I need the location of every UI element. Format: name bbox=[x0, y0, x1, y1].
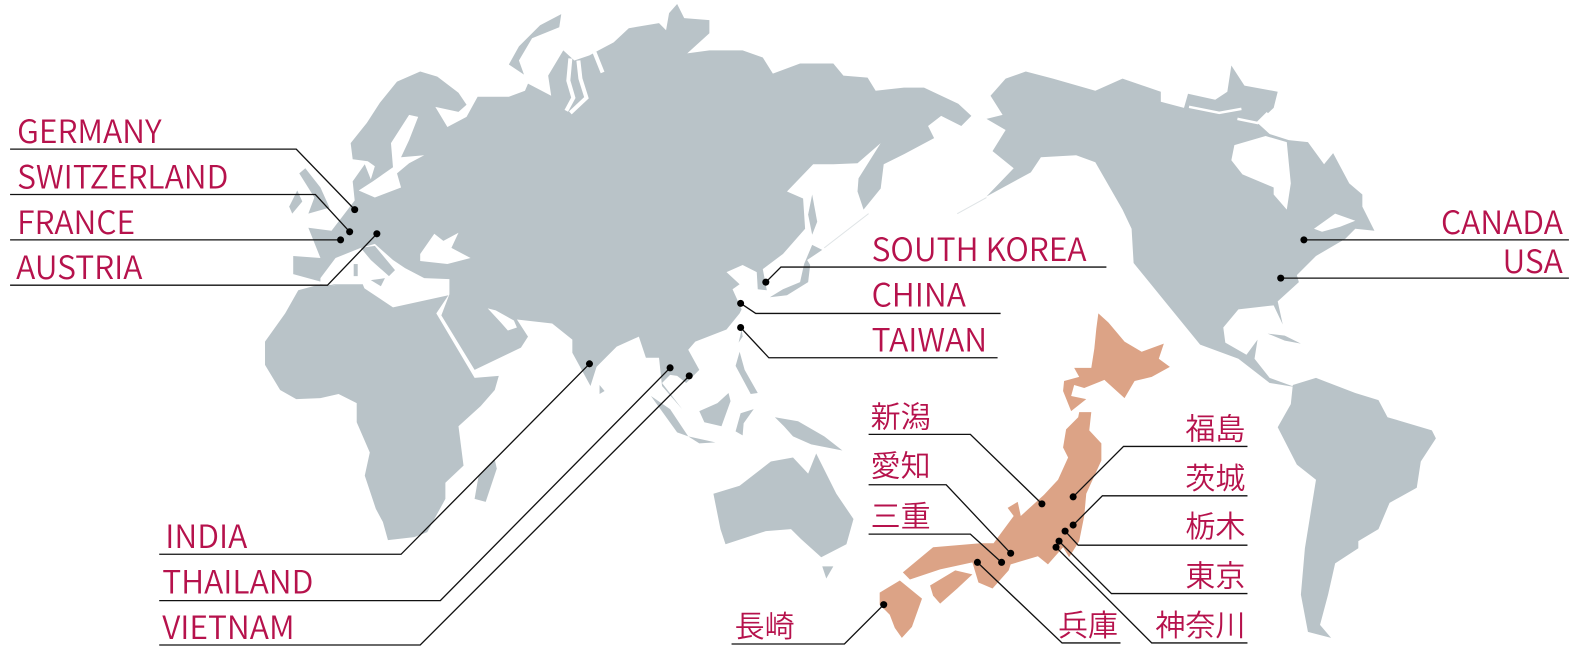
Kyushu bbox=[880, 580, 922, 638]
callout: Switzerland: SWITZERLAND bbox=[17, 152, 228, 198]
callout: Ibaraki: 茨城 bbox=[1185, 454, 1245, 498]
callout: Vietnam: VIETNAM bbox=[162, 603, 295, 648]
island: Sulawesi bbox=[736, 409, 754, 435]
island: Sumatra bbox=[651, 396, 688, 436]
callout: Austria bbox=[10, 230, 380, 289]
callout: Ibaraki bbox=[1070, 454, 1247, 529]
callout: France bbox=[10, 198, 344, 244]
sea: Arctic channels bbox=[1189, 107, 1268, 123]
callout: Switzerland bbox=[10, 152, 353, 235]
callout: Hyogo bbox=[974, 559, 1121, 645]
island: Sri Lanka bbox=[600, 385, 605, 394]
callout: Kanagawa: 神奈川 bbox=[1155, 601, 1245, 645]
callout: Austria: AUSTRIA bbox=[16, 243, 142, 289]
sea: Baltic bbox=[359, 115, 424, 198]
landmass: Eurasia bbox=[293, 4, 971, 409]
island: Sardinia bbox=[354, 264, 358, 276]
callout: Tochigi: 栃木 bbox=[1185, 502, 1245, 546]
island: Sakhalin bbox=[808, 195, 817, 235]
island: Ireland bbox=[289, 190, 302, 214]
callout: Tochigi bbox=[1062, 502, 1247, 546]
callout: Aichi bbox=[869, 442, 1014, 557]
callout: Thailand: THAILAND bbox=[162, 558, 313, 604]
callout: South Korea bbox=[762, 225, 1106, 286]
callout: Fukushima: 福島 bbox=[1185, 404, 1245, 448]
sea: Hudson Bay bbox=[1231, 136, 1291, 210]
callout: Thailand bbox=[159, 364, 674, 604]
callout: India bbox=[159, 360, 593, 558]
island: Japan in grey bbox=[770, 245, 822, 297]
callout: Nagasaki bbox=[732, 601, 887, 646]
island: Borneo bbox=[699, 393, 731, 426]
Hokkaido bbox=[1063, 313, 1170, 411]
sea: Gulf of St Lawrence bbox=[1314, 214, 1355, 232]
Shikoku bbox=[930, 570, 972, 604]
landmass: South America bbox=[1278, 378, 1436, 638]
island: Tasmania bbox=[822, 566, 833, 578]
sea: Black Sea bbox=[420, 233, 471, 264]
callout: USA bbox=[1277, 237, 1569, 283]
world map bbox=[265, 4, 1436, 638]
callout: Tokyo: 東京 bbox=[1185, 552, 1245, 596]
callout: India: INDIA bbox=[165, 512, 247, 558]
callout: Niigata: 新潟 bbox=[871, 392, 931, 436]
callout: Mie bbox=[869, 492, 1005, 566]
sea: Persian Gulf bbox=[488, 308, 517, 331]
callout: USA: USA bbox=[1502, 237, 1563, 283]
callout: Taiwan: TAIWAN bbox=[872, 316, 987, 362]
sea: Arctic inlets bbox=[566, 52, 603, 113]
landmass: Italy bbox=[361, 246, 395, 276]
island: Java bbox=[688, 436, 715, 443]
island: Philippines bbox=[736, 352, 758, 394]
callout: Germany: GERMANY bbox=[17, 107, 162, 153]
callout: Canada: CANADA bbox=[1441, 198, 1563, 244]
sea: Gulf of California bbox=[1165, 304, 1184, 335]
callout: Niigata bbox=[869, 392, 1045, 507]
callout: Germany bbox=[10, 107, 358, 213]
map of Japan bbox=[880, 313, 1170, 638]
callout: China: CHINA bbox=[872, 270, 966, 316]
island: Sicily bbox=[371, 278, 385, 286]
island: Great Britain bbox=[299, 168, 330, 214]
callout: South Korea: SOUTH KOREA bbox=[872, 225, 1086, 271]
callout: Kanagawa bbox=[1052, 544, 1247, 645]
island: Taiwan bbox=[739, 330, 743, 343]
callout: Vietnam bbox=[159, 372, 693, 648]
island: Cuba bbox=[1268, 334, 1301, 344]
callout: Taiwan bbox=[737, 316, 998, 362]
island: New Guinea bbox=[775, 417, 842, 450]
Honshu bbox=[903, 412, 1101, 589]
callout: Nagasaki: 長崎 bbox=[735, 602, 795, 646]
island: Madagascar bbox=[475, 460, 497, 502]
landmass: Australia bbox=[713, 453, 853, 557]
island: Novaya Zemlya bbox=[509, 14, 561, 75]
callout: Tokyo bbox=[1056, 538, 1247, 596]
callout: Aichi: 愛知 bbox=[871, 442, 931, 486]
landmass: Africa bbox=[265, 284, 499, 540]
callout: Fukushima bbox=[1070, 404, 1247, 500]
callout: France: FRANCE bbox=[17, 198, 135, 244]
callout: Mie: 三重 bbox=[871, 492, 931, 536]
callout: Hyogo: 兵庫 bbox=[1058, 601, 1118, 645]
island chain: Aleutian bbox=[957, 198, 986, 214]
sea: Mediterranean bbox=[320, 244, 449, 308]
callout: Canada bbox=[1300, 198, 1569, 244]
callout: China bbox=[737, 270, 1001, 316]
island chain: Kuril bbox=[824, 214, 869, 248]
landmass: North America bbox=[986, 66, 1374, 387]
